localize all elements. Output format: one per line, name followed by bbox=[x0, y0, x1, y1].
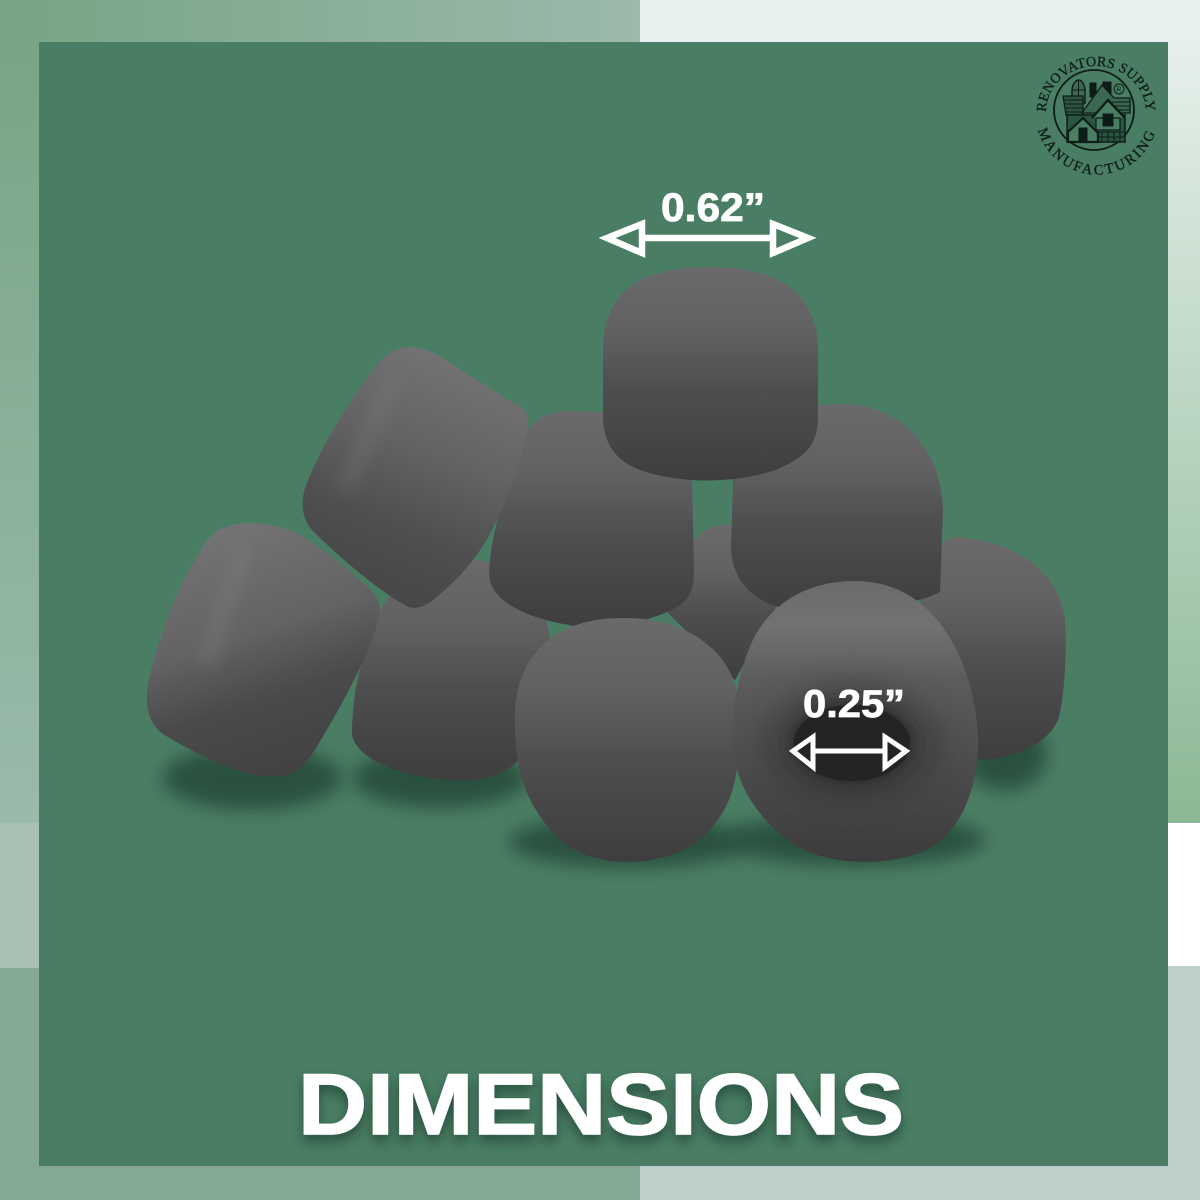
heading: DIMENSIONS bbox=[298, 1057, 904, 1153]
cap: hidden middle bbox=[665, 525, 780, 680]
cast shadows bbox=[162, 719, 1047, 868]
cap: front middle bbox=[515, 618, 738, 862]
label: 0.62 inch: 0.62” bbox=[661, 186, 765, 230]
logo: Renovators Supply Manufacturing bbox=[1036, 56, 1156, 175]
dimension arrow: outer diameter bbox=[607, 224, 808, 253]
cap: top bbox=[603, 267, 818, 480]
product photo: pile of grey caps bbox=[147, 267, 1066, 868]
logo: Renovators Supply Manufacturing: MANUFACTURING bbox=[1038, 126, 1154, 175]
cap: far left bbox=[147, 523, 380, 777]
cap: tilted upper left bbox=[303, 347, 528, 608]
cap: upper middle bbox=[489, 411, 694, 627]
cap: behind top right bbox=[731, 404, 943, 612]
cap: lower left bbox=[352, 558, 550, 780]
icon: house bbox=[1063, 80, 1130, 142]
dimension arrow: inner diameter bbox=[793, 737, 906, 767]
cap: back right bbox=[920, 537, 1066, 760]
cap: front right with hole bbox=[732, 581, 978, 862]
logo: Renovators Supply Manufacturing: RENOVATORS SUPPLY bbox=[1036, 56, 1156, 112]
registered mark: R bbox=[1116, 86, 1121, 94]
label: 0.25 inch: 0.25” bbox=[803, 683, 905, 726]
